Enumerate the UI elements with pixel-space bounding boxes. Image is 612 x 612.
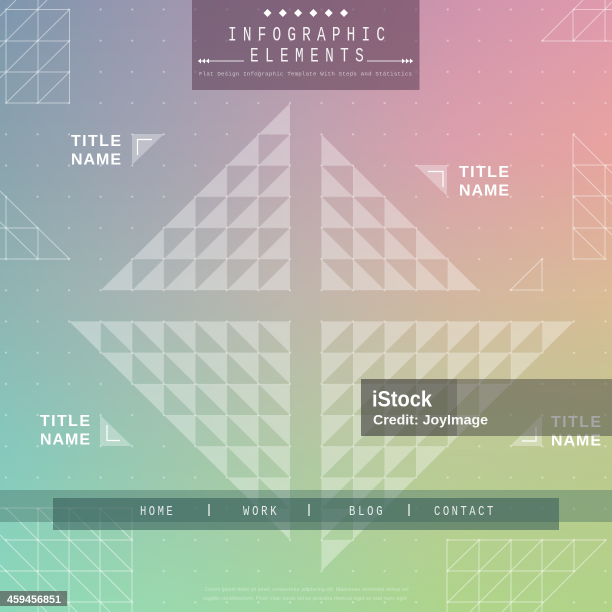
navigation bar: HOME — [140, 504, 173, 519]
navigation bar: WORK — [243, 504, 277, 519]
triangle chart: top left — [101, 103, 290, 290]
arrow: left — [198, 58, 244, 64]
arrow: right — [367, 58, 413, 64]
wireframe: left middle — [0, 191, 70, 259]
label: top right — [459, 164, 509, 200]
subtitle: Flat Design Infographic Template With Steps And Statistics — [199, 70, 412, 78]
icon: bottom left triangle — [100, 415, 132, 446]
label: bottom right: NAME — [551, 432, 601, 450]
watermark: iStock: Credit: JoyImage — [373, 412, 488, 428]
footer lorem text: Lorem ipsum dolor sit amet, consectetur adipiscing elit. Maecenas venenatis metus vel — [205, 587, 409, 593]
triangle chart: top right — [322, 134, 479, 290]
footer lorem text — [203, 587, 409, 602]
wireframe: top left — [0, 0, 70, 103]
wireframe: top right — [542, 0, 612, 41]
heading: INFOGRAPHIC — [228, 24, 385, 47]
label: top left: NAME — [71, 152, 121, 168]
label: bottom left: NAME — [40, 432, 90, 448]
label: top left: TITLE — [71, 133, 121, 150]
wireframe: small triangle right — [510, 259, 542, 290]
label: bottom left — [40, 413, 90, 448]
watermark: iStock — [361, 379, 612, 436]
heading: ELEMENTS — [250, 45, 364, 68]
wireframe: bottom left — [0, 508, 132, 612]
icon: diamonds row — [264, 9, 348, 17]
label: bottom right: TITLE — [551, 414, 601, 431]
navigation bar: CONTACT — [434, 504, 493, 519]
label: bottom right — [551, 414, 601, 450]
label: bottom left: TITLE — [40, 413, 90, 430]
watermark: iStock: iStock — [372, 386, 433, 412]
icon: bottom right triangle — [510, 415, 542, 446]
icon: top right triangle — [415, 165, 447, 196]
triangle chart: bottom left — [69, 322, 290, 540]
heading — [228, 24, 385, 68]
triangle chart: bottom right — [322, 322, 574, 571]
wireframe: right middle — [573, 134, 612, 259]
icon: top left triangle — [132, 134, 164, 165]
navigation bar — [0, 490, 612, 530]
label: top right: NAME — [459, 182, 509, 200]
footer lorem text: sagittis condimentum. Proin vitae purus vel ex pharetra rhoncus eget ac erat nunc eget — [203, 596, 407, 602]
navigation bar: BLOG — [349, 504, 383, 519]
header banner — [192, 0, 420, 90]
label: top right: TITLE — [459, 164, 509, 181]
wireframe: bottom right — [447, 540, 606, 612]
label: top left — [71, 133, 121, 168]
watermark: image number: 459456851 — [7, 594, 61, 606]
watermark: image number — [0, 591, 67, 606]
